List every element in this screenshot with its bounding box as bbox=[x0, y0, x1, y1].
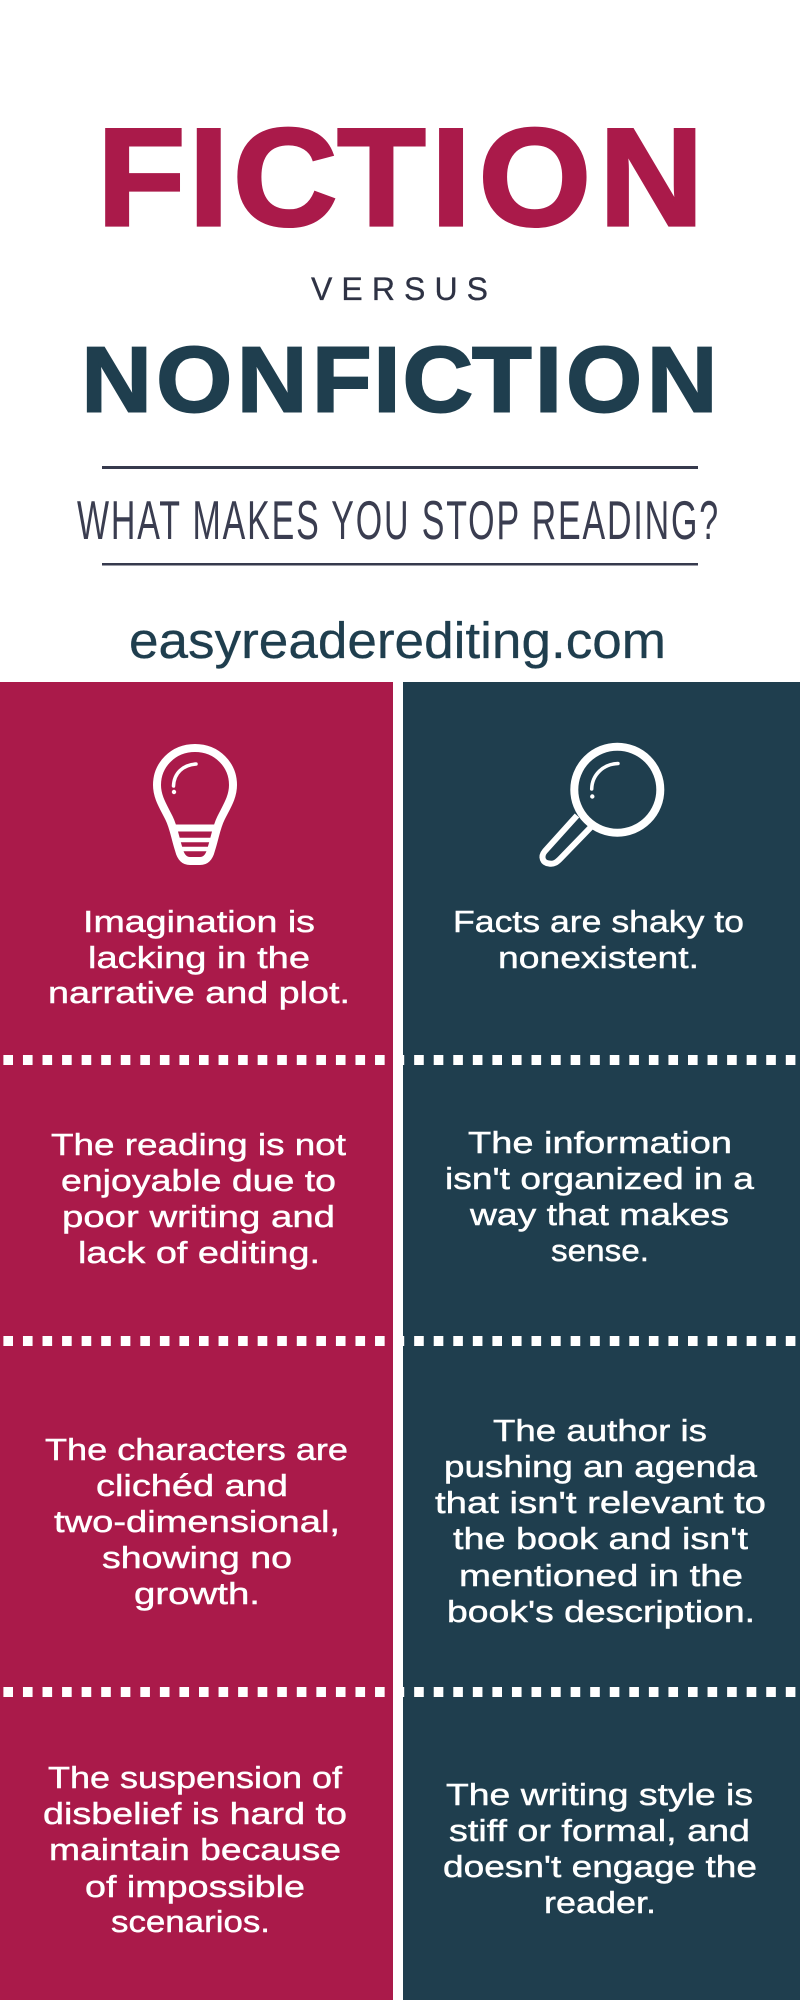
subtitle: versus: VERSUS bbox=[311, 271, 488, 307]
text: reading: lack of editing. bbox=[78, 1235, 320, 1270]
text: characters: The characters are bbox=[45, 1432, 348, 1467]
text: characters: clichéd and bbox=[96, 1468, 288, 1503]
text: suspension of disbelief: scenarios. bbox=[111, 1904, 270, 1939]
title: fiction: FICTION bbox=[97, 101, 704, 256]
text: agenda: The author is bbox=[493, 1413, 707, 1448]
text: characters: two-dimensional, bbox=[54, 1504, 340, 1539]
panel: nonfiction column bbox=[403, 682, 800, 2000]
text: writing style: stiff or formal, and bbox=[449, 1813, 750, 1848]
panel: fiction column bbox=[0, 682, 393, 2000]
text: facts: Facts are shaky to bbox=[453, 904, 744, 939]
text: facts: nonexistent. bbox=[498, 940, 699, 975]
text: imagination: Imagination is bbox=[83, 904, 315, 939]
text: agenda bbox=[435, 1413, 766, 1629]
header bbox=[77, 101, 720, 669]
text: agenda: book's description. bbox=[447, 1594, 755, 1629]
text: suspension of disbelief: The suspension of bbox=[48, 1760, 342, 1795]
text: suspension of disbelief: maintain because bbox=[49, 1832, 341, 1867]
title: nonfiction: NONFICTION bbox=[81, 329, 717, 432]
text: characters bbox=[45, 1432, 348, 1611]
website: easyreaderediting.com bbox=[129, 612, 666, 669]
text: reading: poor writing and bbox=[62, 1199, 335, 1234]
text: agenda: the book and isn't bbox=[453, 1521, 748, 1556]
text: imagination: lacking in the bbox=[88, 940, 310, 975]
text: agenda: that isn't relevant to bbox=[435, 1485, 766, 1520]
text: facts bbox=[453, 904, 744, 975]
text: writing style: The writing style is bbox=[446, 1777, 753, 1812]
text: imagination bbox=[48, 904, 350, 1010]
text: information bbox=[445, 1125, 755, 1268]
text: agenda: mentioned in the bbox=[459, 1558, 743, 1593]
text: suspension of disbelief: disbelief is hard to bbox=[43, 1796, 347, 1831]
text: information: way that makes bbox=[469, 1197, 729, 1232]
text: agenda: pushing an agenda bbox=[444, 1449, 758, 1484]
text: suspension of disbelief: of impossible bbox=[85, 1869, 305, 1904]
icon: light bulb bbox=[157, 748, 233, 861]
text: imagination: narrative and plot. bbox=[48, 975, 350, 1010]
text: reading bbox=[51, 1127, 346, 1270]
text: information: isn't organized in a bbox=[445, 1161, 755, 1196]
icon: magnifying glass bbox=[542, 747, 660, 864]
text: suspension of disbelief bbox=[43, 1760, 347, 1939]
text: writing style bbox=[443, 1777, 757, 1920]
text: characters: growth. bbox=[134, 1576, 260, 1611]
text: writing style: reader. bbox=[544, 1885, 656, 1920]
text: reading: enjoyable due to bbox=[61, 1163, 336, 1198]
text: information: The information bbox=[468, 1125, 732, 1160]
text: information: sense. bbox=[551, 1233, 649, 1268]
text: reading: The reading is not bbox=[51, 1127, 346, 1162]
text: characters: showing no bbox=[102, 1540, 292, 1575]
text: writing style: doesn't engage the bbox=[443, 1849, 757, 1884]
